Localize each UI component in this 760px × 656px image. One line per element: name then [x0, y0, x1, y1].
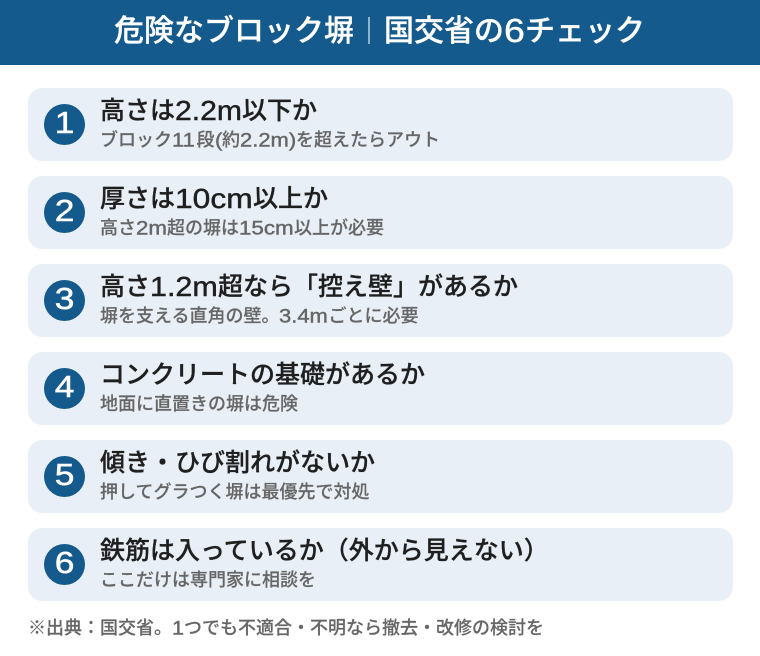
number badge 5: 5	[55, 457, 74, 492]
check 1 heading: 高さは 以下か	[100, 97, 317, 125]
panel: check 5	[28, 440, 733, 513]
panel: check 3	[28, 264, 733, 337]
number badge 6	[44, 544, 85, 585]
panel: check 1	[28, 88, 733, 161]
check 1 heading: 2.2m	[175, 96, 242, 126]
check 2 heading: 厚さは 以上か	[100, 185, 328, 213]
check 3 heading: 1.2m	[150, 272, 218, 302]
number badge 5	[44, 456, 85, 497]
check 2 detail: 高さ 超の塀は 以上が必要	[100, 218, 384, 238]
source footnote: 1	[172, 617, 184, 639]
title right: 6	[504, 13, 525, 50]
source footnote: ※出典：国交省。 つでも不適合・不明なら撤去・改修の検討を	[28, 618, 544, 638]
number badge 1	[44, 104, 85, 145]
title banner	[0, 0, 760, 65]
number badge 3	[44, 280, 85, 321]
check 4 heading: コンクリートの基礎があるか	[100, 361, 425, 389]
title left: 危険なブロック塀	[114, 15, 354, 48]
check 3 detail: 3.4m	[279, 305, 328, 327]
panel: check 6	[28, 528, 733, 601]
panel: check 4	[28, 352, 733, 425]
check 6 detail: ここだけは専門家に相談を	[100, 570, 316, 590]
check 3 heading: 高さ 超なら「控え壁」があるか	[100, 273, 518, 301]
check 1 detail: ブロック 段 約 を超えたらアウト	[100, 130, 440, 150]
check 1 detail: 11	[172, 129, 195, 151]
number badge 4	[44, 368, 85, 409]
number badge 4: 4	[55, 369, 74, 404]
check 4 detail: 地面に直置きの塀は危険	[100, 394, 298, 414]
check 5 heading: 傾き・ひび割れがないか	[100, 449, 375, 477]
check 6 heading: 鉄筋は入っているか（外から見えない）	[100, 537, 549, 565]
number badge 1: 1	[55, 105, 74, 140]
number badge 6: 6	[55, 545, 74, 580]
panel: check 2	[28, 176, 733, 249]
check 5 detail: 押してグラつく塀は最優先で対処	[100, 482, 369, 502]
check 1 detail: 2.2m)	[240, 129, 296, 151]
check 1 detail: (	[214, 129, 222, 151]
check 3 detail: 塀を支える直角の壁。 ごとに必要	[100, 306, 418, 326]
number badge 3: 3	[55, 281, 74, 316]
number badge 2: 2	[55, 193, 74, 228]
check 2 heading: 10cm	[175, 184, 253, 214]
check 2 detail: 15cm	[239, 217, 294, 239]
number badge 2	[44, 192, 85, 233]
title right: 国交省の チェック	[384, 15, 645, 48]
check 2 detail: 2m	[136, 217, 167, 239]
